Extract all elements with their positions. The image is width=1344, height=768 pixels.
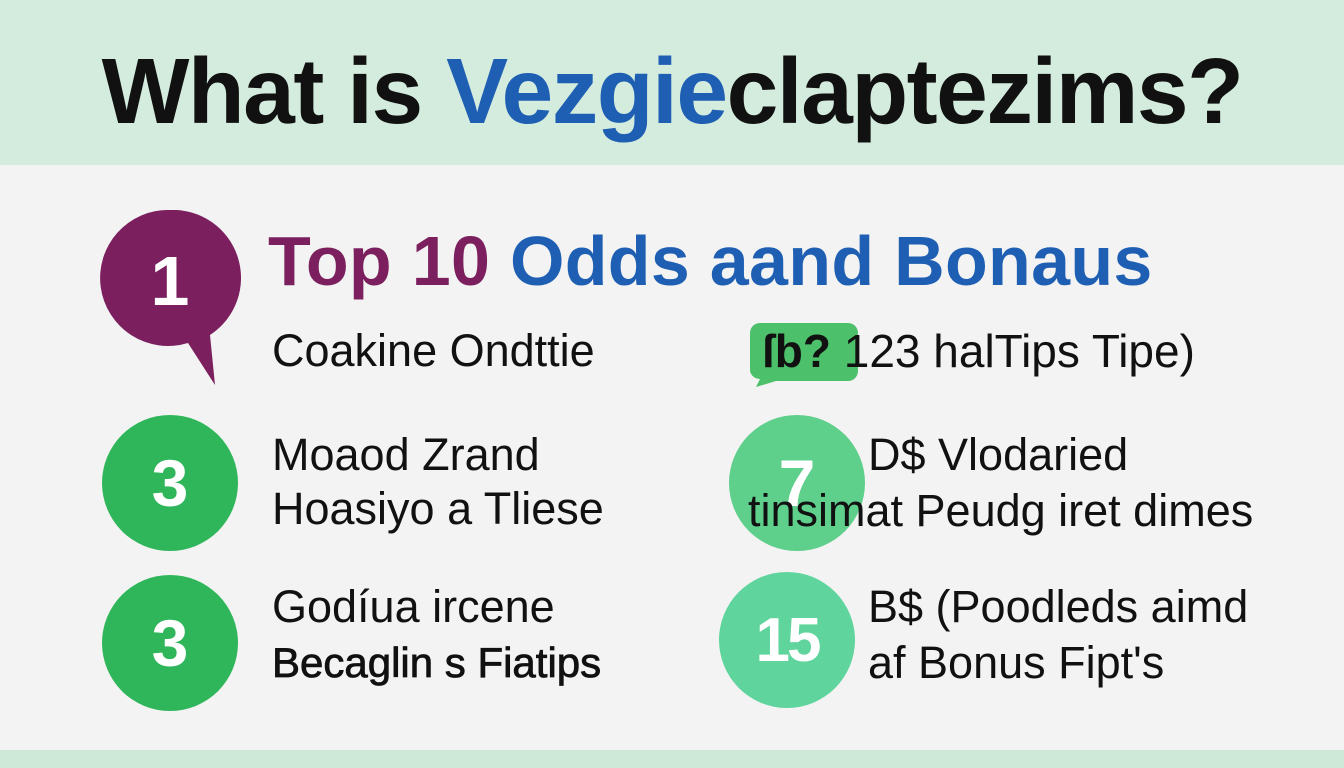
icon: speech bubble 1: 1: [151, 242, 189, 320]
footer band: [0, 750, 1344, 768]
text: row 2 left: [272, 429, 604, 534]
circle 3 bottom: [102, 575, 238, 711]
text: row 2 right: D$ Vlodaried: [868, 429, 1128, 480]
circle 15: [719, 572, 855, 708]
text: Becaglin s Fiatips: [272, 639, 601, 686]
circle 3: [102, 415, 238, 551]
text: tinsimat Peudg iret dimes: [748, 485, 1253, 536]
title: What is Vezgieclaptezims?: [102, 39, 1242, 143]
text: row 2 left: Hoasiyo a Tliese: [272, 483, 604, 534]
text: row 1 left: Coakine Ondttie: [272, 325, 595, 376]
text: row 1 right: ſb? 123 halTips Tipe): [762, 325, 1195, 377]
icon: speech bubble 1: [100, 210, 241, 385]
circle 7: 7: [779, 446, 815, 520]
text: row 2 left: Moaod Zrand: [272, 429, 540, 480]
badge: fb?: [750, 323, 858, 387]
text: row 3 left: Godíua ircene: [272, 581, 555, 632]
circle 3 bottom: 3: [152, 606, 188, 680]
text: row 3 right: B$ (Poodleds aimd: [868, 581, 1248, 632]
circle 3: 3: [152, 446, 188, 520]
circle 7: [729, 415, 865, 551]
circle 15: 15: [756, 606, 818, 674]
heading: Top 10 Odds aand Bonaus: [268, 222, 1153, 300]
text: af Bonus Fipt's: [868, 637, 1164, 688]
header band: [0, 0, 1344, 165]
